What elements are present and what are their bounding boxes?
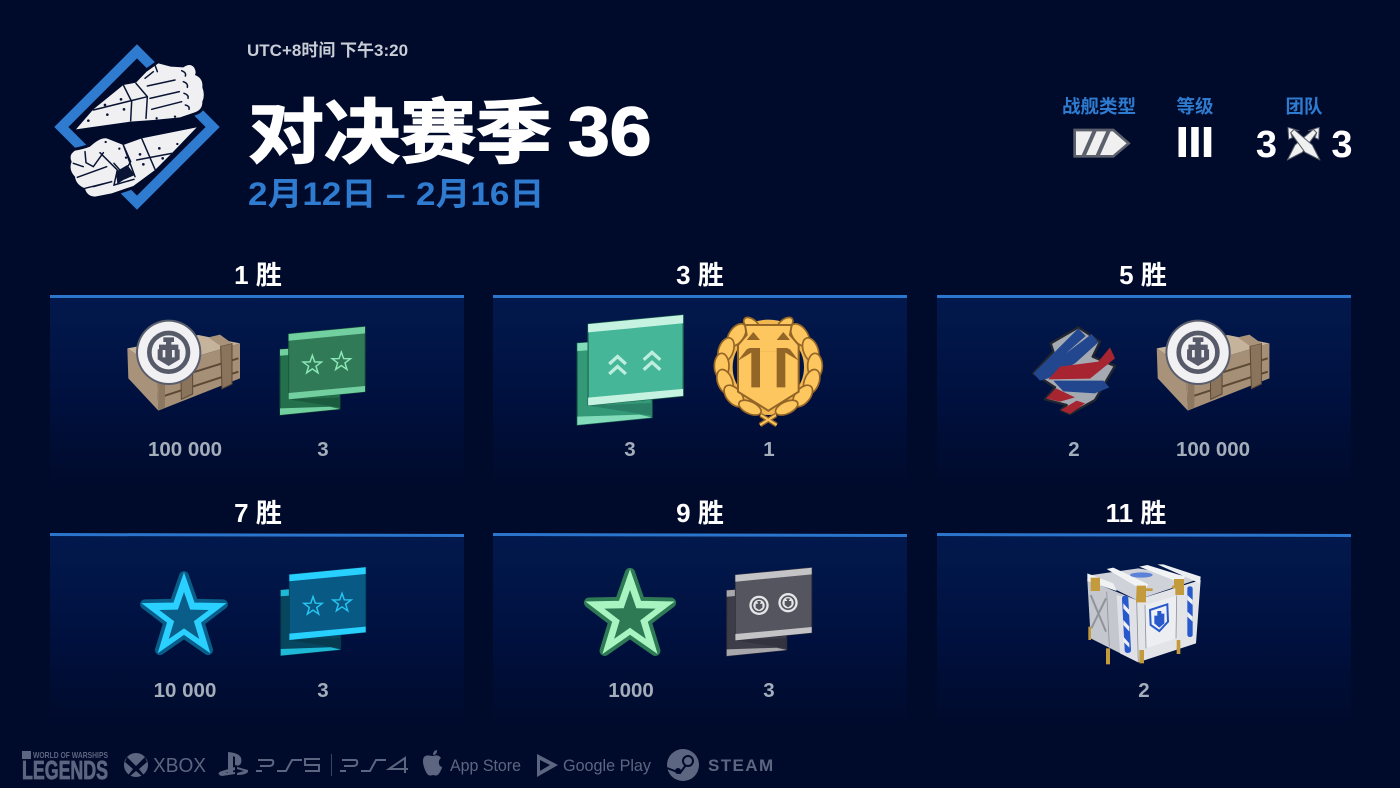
panel: 5 wins xyxy=(937,260,1351,487)
value: 10 000 xyxy=(154,679,216,702)
battle parameters xyxy=(1062,96,1353,166)
icon: credits crate xyxy=(1157,320,1269,411)
value: 3 xyxy=(317,438,329,461)
date range: 2月16日 xyxy=(416,176,544,213)
icon: blue star xyxy=(145,576,223,650)
footer: platform logos xyxy=(22,749,774,785)
title: 36 xyxy=(568,94,651,170)
icon: blue star flag xyxy=(281,567,366,656)
time label: UTC+8时间 下午3:20 xyxy=(247,40,408,60)
logo: World of Warships Legends: WORLD OF WARSHIPS xyxy=(33,750,108,760)
date range: – xyxy=(386,176,405,213)
heading: 5 胜 xyxy=(1119,260,1167,290)
heading: 1 胜 xyxy=(234,260,282,290)
icon: grey coin flag xyxy=(727,568,812,656)
logo: Google Play xyxy=(537,754,651,777)
value: 1000 xyxy=(608,679,654,702)
logo: Xbox: XBOX xyxy=(153,755,206,777)
logo: Steam: STEAM xyxy=(708,756,774,775)
label: ship type: 战舰类型 xyxy=(1062,96,1136,117)
icon: tier III xyxy=(1178,127,1211,157)
title: 对决赛季 xyxy=(248,95,552,172)
icon: teal chevron flag xyxy=(577,315,683,425)
value: 100 000 xyxy=(1176,438,1250,461)
icon: ship class xyxy=(1075,130,1129,156)
value: 1 xyxy=(763,438,775,461)
logo: App Store: App Store xyxy=(450,756,521,775)
label: tier: 等级 xyxy=(1176,96,1214,117)
icon: credits crate xyxy=(127,320,240,411)
header emblem: gauntlets in diamond xyxy=(61,51,213,203)
value: 100 000 xyxy=(148,438,222,461)
heading: 11 胜 xyxy=(1106,498,1166,528)
logo: World of Warships Legends: LEGENDS xyxy=(22,755,108,785)
heading: 9 胜 xyxy=(676,498,724,528)
date range: 2月12日 xyxy=(248,176,376,213)
heading: 7 胜 xyxy=(234,498,282,528)
logo: App Store xyxy=(423,750,521,776)
icon: gold wreath emblem xyxy=(714,315,823,425)
team size: 3 xyxy=(1256,124,1277,166)
value: 2 xyxy=(1068,438,1080,461)
logo: Steam xyxy=(667,749,774,781)
icon: red white blue camouflage xyxy=(1033,327,1115,414)
panel: 1 win xyxy=(50,260,464,487)
icon: green star xyxy=(589,573,671,651)
logo: Google Play: Google Play xyxy=(563,756,651,775)
value: 3 xyxy=(317,679,329,702)
logo: PlayStation 5 and 4 xyxy=(219,752,408,776)
panel: 11 wins xyxy=(937,498,1351,726)
icon: crossed swords xyxy=(1287,127,1320,160)
label: team: 团队 xyxy=(1285,96,1323,117)
panel: 7 wins xyxy=(50,498,464,726)
icon: green star flag xyxy=(280,327,365,415)
logo: World of Warships Legends xyxy=(22,750,108,785)
panel: 9 wins xyxy=(493,498,907,726)
value: 3 xyxy=(763,679,775,702)
value: 2 xyxy=(1138,679,1150,702)
logo: Xbox xyxy=(124,753,206,778)
heading: 3 胜 xyxy=(676,260,724,290)
value: 3 xyxy=(624,438,636,461)
team size: 3 xyxy=(1331,124,1353,166)
icon: white supply crate xyxy=(1087,564,1201,664)
panel: 3 wins xyxy=(493,260,907,487)
